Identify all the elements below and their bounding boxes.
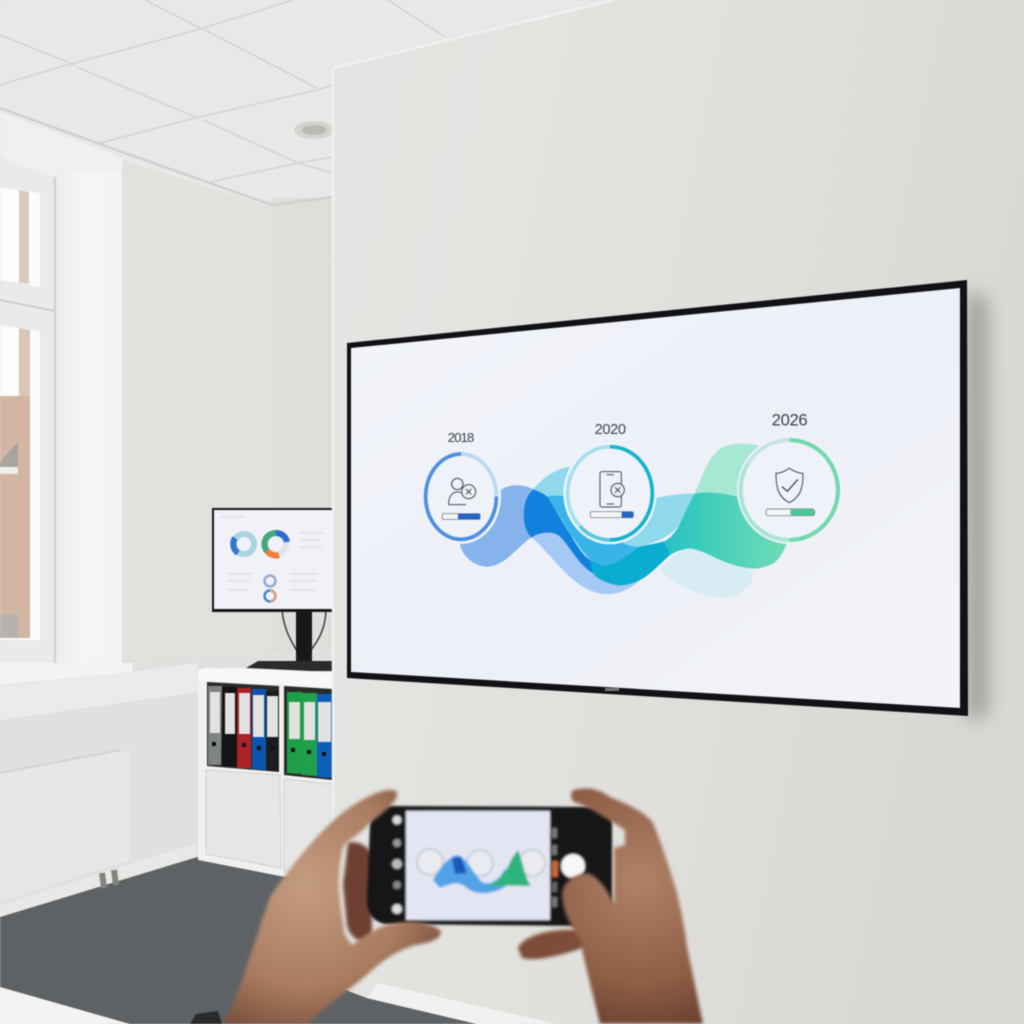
wave chart: [421, 410, 842, 598]
monitor donut charts: [233, 533, 287, 602]
phone screen: [406, 811, 550, 920]
bright blue wave: [547, 496, 640, 565]
window soffit: [0, 112, 122, 178]
upper pane: [0, 187, 40, 287]
phone preview rings: [417, 849, 545, 876]
icon: person with x badge: [449, 478, 476, 505]
main wall pillar: [332, 0, 1024, 1024]
node 2020: [563, 442, 657, 544]
far wall: [272, 198, 334, 678]
tv shadow: [966, 290, 988, 720]
icon: phone with x badge: [600, 472, 624, 507]
icon: shield with check: [776, 468, 803, 503]
pale wave: [660, 548, 753, 598]
progress bar: [442, 514, 480, 519]
periwinkle wave: [460, 485, 533, 567]
right hand back fingers: [518, 930, 590, 959]
wall tv: [347, 280, 968, 716]
window recess: [57, 172, 122, 667]
year labels: 2020: [595, 422, 626, 438]
small desk monitor: [212, 508, 334, 671]
phone camera buttons: [392, 816, 585, 914]
phone: [367, 806, 612, 926]
lower wall: [0, 650, 332, 925]
window: [0, 157, 57, 665]
shelf cabinet: [198, 667, 332, 880]
year labels: 2018: [448, 430, 474, 445]
ceiling spotlight: [294, 121, 334, 139]
year labels: [448, 410, 808, 445]
skirting: [0, 843, 197, 917]
watch strap: [190, 1011, 222, 1024]
right hand: [562, 788, 703, 1024]
monitor text lines: [221, 517, 323, 590]
side table: [0, 987, 130, 1024]
phone wave: [433, 850, 531, 893]
node 2026: [737, 436, 842, 544]
binders row: [208, 686, 332, 778]
progress bar: [590, 512, 633, 518]
window sill: [0, 663, 133, 685]
lower pane: [0, 325, 40, 640]
left hand back fingers: [343, 842, 372, 942]
left hand: [223, 790, 441, 1024]
year labels: 2026: [772, 410, 808, 429]
progress bar: [766, 509, 815, 516]
light blue lower wave: [532, 533, 640, 594]
side wall: [122, 160, 272, 670]
floor: [0, 857, 477, 1024]
light cyan wave: [533, 467, 695, 567]
ceiling: [0, 0, 620, 210]
tv screen: [351, 288, 960, 708]
node 2018: [421, 449, 501, 544]
cabinet doors: [206, 770, 332, 878]
radiator: [0, 750, 130, 902]
teal main wave: [590, 492, 787, 585]
mint peak wave: [695, 444, 763, 497]
pillar skirting: [367, 983, 557, 1024]
dark blue overlap: [524, 489, 593, 573]
deep teal wave: [590, 542, 670, 585]
